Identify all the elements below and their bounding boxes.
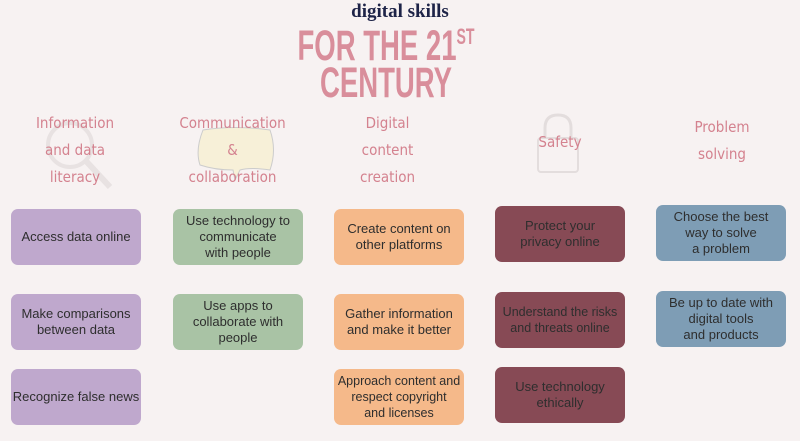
heading: digital content: content (362, 141, 413, 159)
heading: digital content: Digital (366, 114, 409, 132)
heading: problem solving (694, 118, 750, 163)
box (11, 209, 141, 265)
box (656, 291, 786, 347)
heading: problem solving: Problem (694, 118, 750, 136)
box: Recognize false news (13, 389, 139, 404)
heading: information: Information (36, 114, 114, 132)
box: Understand the risks (503, 305, 617, 319)
box (334, 294, 464, 350)
subtitle: digital skills (351, 1, 449, 22)
box: other platforms (356, 237, 442, 252)
box (495, 206, 625, 262)
box: Choose the best (674, 209, 768, 224)
heading: problem solving: solving (698, 145, 746, 163)
icon: speech bubble (198, 127, 274, 180)
box: Create content on (347, 221, 451, 236)
box (334, 209, 464, 265)
main title (297, 22, 475, 107)
box (173, 209, 303, 265)
box: and products (683, 327, 759, 342)
box: between data (37, 322, 115, 337)
box: and make it better (347, 322, 451, 337)
column: problem solving (656, 205, 786, 347)
box (11, 369, 141, 425)
box: Approach content and (338, 374, 460, 388)
main title: FOR THE 21ST (297, 22, 475, 70)
heading: digital content: creation (360, 168, 415, 186)
box (11, 294, 141, 350)
heading: communication: & (227, 141, 238, 159)
box (334, 369, 464, 425)
box: Access data online (21, 229, 131, 244)
column: information (11, 209, 141, 425)
box: and licenses (364, 406, 434, 420)
box: digital tools (688, 311, 754, 326)
heading: communication: collaboration (189, 168, 276, 186)
box: with people (205, 245, 271, 260)
icon: lock (537, 114, 579, 173)
box: people (218, 330, 258, 345)
box: respect copyright (351, 390, 447, 404)
box: ethically (537, 395, 583, 410)
box: and threats online (510, 321, 610, 335)
box (495, 367, 625, 423)
heading: information: and data (45, 141, 105, 159)
box: Make comparisons (21, 306, 131, 321)
box: a problem (692, 241, 750, 256)
box: collaborate with (193, 314, 283, 329)
box: communicate (199, 229, 277, 244)
box: Use technology (515, 379, 605, 394)
heading: communication (179, 114, 286, 186)
heading: digital content (360, 114, 415, 186)
heading: information: literacy (50, 168, 100, 186)
title (297, 1, 475, 107)
main title: CENTURY (320, 59, 452, 107)
box (495, 292, 625, 348)
box (173, 294, 303, 350)
box (656, 205, 786, 261)
box: privacy online (520, 234, 600, 249)
heading: information (36, 114, 114, 186)
column: communication (173, 209, 303, 350)
icon: magnifier (46, 121, 112, 189)
heading: safety: Safety (538, 133, 582, 151)
column: safety (495, 206, 625, 423)
heading: communication: Communication (179, 114, 286, 132)
box: Protect your (525, 218, 595, 233)
column: content (334, 209, 464, 425)
box: way to solve (685, 225, 757, 240)
box: Be up to date with (669, 295, 773, 310)
box: Use apps to (203, 298, 273, 313)
box: Use technology to (186, 213, 290, 228)
box: Gather information (345, 306, 453, 321)
